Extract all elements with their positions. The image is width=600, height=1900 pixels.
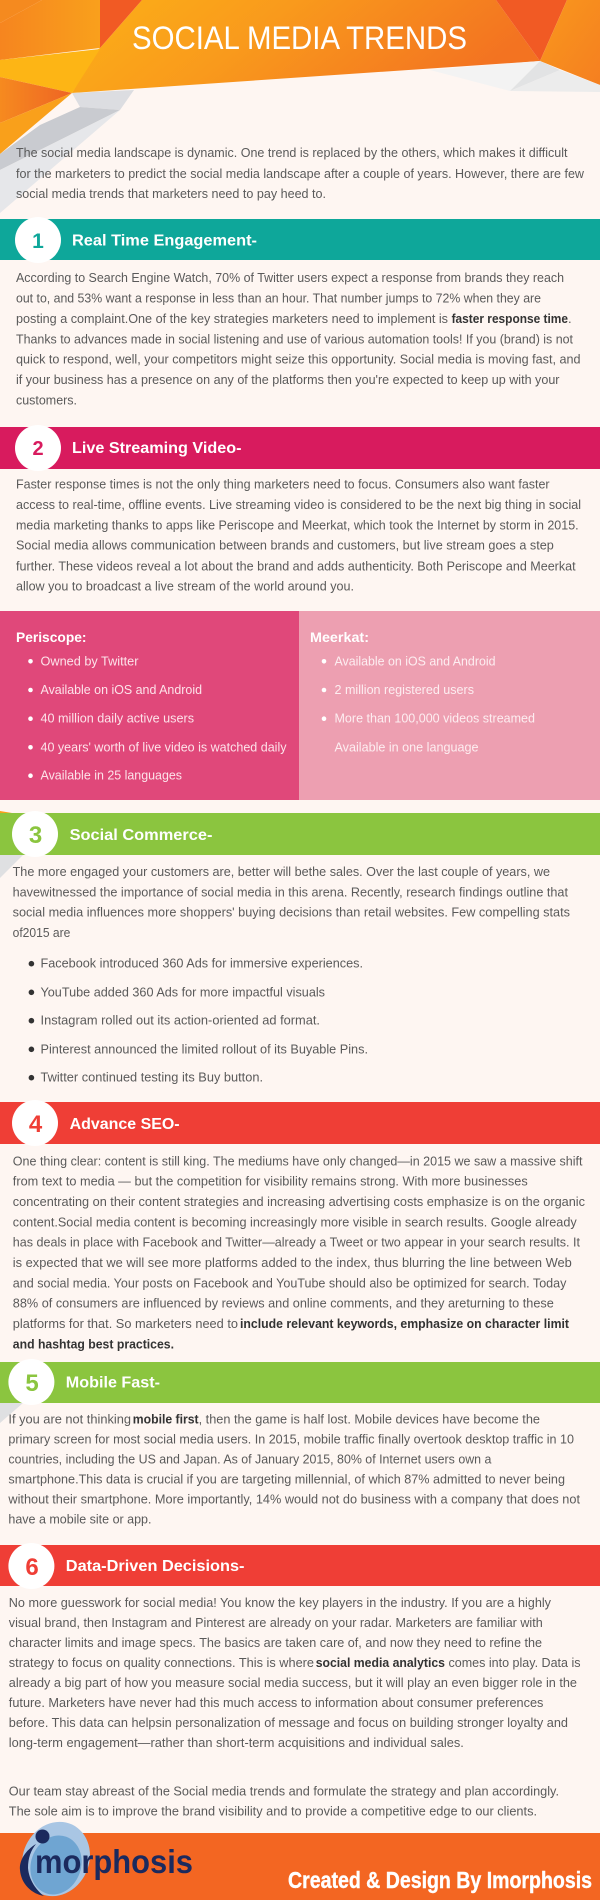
icon: number 3 badge [12,811,58,857]
panel: Periscope [0,611,299,800]
icon: number 2 badge: 2 [32,438,44,460]
section 2 body text [16,476,581,594]
section 1 body text [16,270,580,408]
intro paragraph: social media trends that marketers need to pay heed to. [16,186,326,201]
section 3 body text: of2015 are [13,925,70,940]
Periscope bullet list: Available in 25 languages [40,768,182,783]
panel: Meerkat [299,611,600,800]
section 4 body text: 88% of consumers are influenced by reviews and online comments, and they areturning to these [13,1296,554,1311]
section 6 body text: visual brand, then Instagram and Pinterest are already on your radar. Marketers are familiar with [9,1615,543,1630]
icon: number 3 badge: 3 [29,822,42,849]
Periscope bullet list: Owned by Twitter [40,653,139,668]
section 5 body text: primary screen for most social media users. In 2015, mobile traffic finally overtook desktop traffic in 10 [8,1432,574,1447]
section 4 body text: One thing clear: content is still king. The mediums have only changed—in 2015 we saw a massive shift [13,1153,583,1168]
footer bar [0,1833,600,1900]
section 5 body text: smartphone.This data is crucial if you are targeting millennial, of which 87% admitted to never being [8,1472,565,1487]
section 5 heading band [0,1359,600,1423]
section 6 body text: strategy to focus on quality connections. This is where [9,1655,314,1670]
section 4 body text: and hashtag best practices. [13,1336,174,1351]
section 3 body text: The more engaged your customers are, better will bethe sales. Over the last couple of years, we [13,864,550,879]
intro paragraph: for the marketers to predict the social media landscape after a couple of years. However, there are few [16,166,585,181]
Periscope bullet list: 40 years' worth of live video is watched daily [40,739,287,754]
Meerkat bullet list [322,653,535,754]
Meerkat heading: Meerkat: [310,629,369,645]
icon: number 2 badge [15,425,61,471]
section 6 heading band [0,1543,600,1589]
section 6 body text: long-term engagement—rather than short-term acquisitions and individual sales. [9,1735,464,1750]
section 1 body text: posting a complaint.One of the key strategies marketers need to implement is [16,311,448,326]
closing paragraph: Our team stay abreast of the Social media trends and formulate the strategy and plan accordingly. [9,1784,559,1799]
section 1 heading band [0,217,600,263]
Periscope bullet list: 40 million daily active users [40,711,194,726]
section 5 body text: , then the game is half lost. Mobile devices have become the [199,1412,540,1427]
section 4 body text: content.Social media content is becoming increasingly more visible in search results. Google already [13,1214,577,1229]
heading: Mobile Fast: Mobile Fast- [66,1374,160,1392]
section 1 body text: out to, and 53% want a response in less than an hour. That number jumps to 72% when they are [16,290,541,306]
section 3 bullet list: Facebook introduced 360 Ads for immersive experiences. [40,956,363,971]
heading: Social Commerce: Social Commerce- [70,827,212,844]
section 3 bullet list [29,956,368,1085]
section 4 body text: from text to media — but the competition for visibility remains strong. With more businesses [13,1174,528,1189]
section 1 body text: According to Search Engine Watch, 70% of Twitter users expect a response from brands they reach [16,270,564,285]
section 3 body text: havewitnessed the importance of social media in this arena. Recently, research findings outline that [13,884,568,899]
section 6 body text: before. This data can helpsin personalization of message and focus on building stronger loyalty and [9,1715,568,1730]
logo: Imorphosis [10,1811,193,1900]
Periscope bullet list [28,653,287,783]
heading: Advance SEO: Advance SEO- [70,1116,180,1133]
section 6 body text: social media analytics [316,1655,445,1670]
section 2 heading band [0,425,600,471]
icon: number 4 badge: 4 [29,1111,43,1138]
section 4 body text: concentrating on their content strategies and increasing advertising costs emphasize is on the organic [13,1194,585,1209]
heading: Data-Driven Decisions: Data-Driven Decisions- [66,1558,244,1575]
section 4 body text: has deals in place with Facebook and Twitter—already a Tweet or two appear in your search results. It [13,1235,580,1250]
section 2 body text: media marketing thanks to apps like Periscope and Meerkat, which took the Internet by storm in 2015. [16,517,579,532]
closing paragraph: The sole aim is to improve the brand visibility and to provide a competitive edge to our clients. [9,1804,537,1819]
section 6 body text: already a big part of how you measure social media success, but it will play an even bigger role in the [9,1675,577,1690]
section 1 body text: faster response time [452,311,568,326]
section 3 bullet list: Pinterest announced the limited rollout of its Buyable Pins. [40,1041,368,1056]
Meerkat bullet list: 2 million registered users [334,682,474,697]
Meerkat bullet list: Available in one language [334,739,478,754]
section 3 bullet list: YouTube added 360 Ads for more impactful visuals [40,984,325,999]
section 5 body text: have a mobile site or app. [8,1512,152,1527]
icon: number 6 badge [8,1543,54,1589]
heading: Live Streaming Video: Live Streaming Video- [72,440,242,457]
Meerkat bullet list: Available on iOS and Android [334,653,496,668]
icon: number 4 badge [12,1100,58,1146]
section 3 bullet list: Instagram rolled out its action-oriented ad format. [40,1013,320,1028]
section 3 body text [13,864,570,940]
section 2 body text: allow you to broadcast a live stream of the world around you. [16,579,354,594]
heading: Real Time Engagement: Real Time Engagement- [72,232,257,250]
icon: number 1 badge: 1 [32,230,44,253]
section 3 body text: social media influences more shoppers' buying decisions than retail websites. Few compelling stats [13,905,570,920]
section 2 body text: access to real-time, offline events. Live streaming video is considered to be the next big thing in social [16,497,581,512]
section 5 body text: without their smartphone. More importantly, 14% would not do business with a company that does not [7,1492,580,1507]
section 1 body text: . [568,311,572,326]
section 5 body text: countries, including the US and Japan. As of January 2015, 80% of Internet users own a [8,1452,492,1467]
title: SOCIAL MEDIA TRENDS [132,20,467,56]
closing paragraph [9,1784,559,1819]
header banner: geometric polygons [0,0,600,213]
section 4 body text: is expected that we will see more platforms added to the index, thus blurring the line between Web [13,1255,572,1270]
section 6 body text: character limits and image specs. The basics are taken care of, and now they need to refine the [9,1635,542,1650]
icon: number 5 badge [8,1359,54,1405]
logo: Imorphosis: morphosis [35,1843,193,1880]
section 4 body text: and social media. Your posts on Facebook and YouTube should also be optimized for search. Today [13,1275,567,1290]
section 4 body text [13,1153,585,1351]
section 3 heading band [0,811,600,878]
intro paragraph: The social media landscape is dynamic. One trend is replaced by the others, which makes it difficult [16,145,568,160]
section 4 body text: platforms for that. So marketers need to [13,1316,238,1331]
Meerkat bullet list: More than 100,000 videos streamed [334,711,535,726]
section 4 body text: include relevant keywords, emphasize on character limit [240,1316,570,1331]
section 1 body text: Thanks to advances made in social listening and use of various automation tools! If you (brand) is not [16,331,573,346]
section 2 body text: further. These videos reveal a lot about the brand and adds authenticity. Both Periscope and Meerkat [16,558,576,573]
section 1 body text: customers. [16,393,77,408]
Periscope heading: Periscope: [16,629,86,645]
section 2 body text: Social media allows communication between brands and customers, but live stream goes a step [16,538,554,553]
section 5 body text: mobile first [133,1412,199,1427]
section 3 bullet list: Twitter continued testing its Buy button. [40,1070,263,1085]
section 4 heading band [0,1100,600,1146]
section 1 body text: quick to respond, well, your competitors might seize this opportunity. Social media is moving fast, and [16,352,580,367]
icon: number 1 badge [15,217,61,263]
icon: number 5 badge: 5 [25,1370,39,1397]
section 6 body text [9,1595,581,1750]
section 6 body text: No more guesswork for social media! You know the key players in the industry. If you are a highly [9,1595,551,1610]
icon: number 6 badge: 6 [25,1554,39,1581]
section 6 body text: comes into play. Data is [448,1655,581,1670]
section 6 body text: future. Marketers have never had this much access to information about consumer preferences [9,1695,544,1710]
section 1 body text: if your business has a presence on any of the platforms then you're expected to keep up with your [16,372,560,387]
section 5 body text [7,1412,580,1527]
section 2 body text: Faster response times is not the only thing marketers need to focus. Consumers also want faster [16,476,550,491]
intro paragraph [16,145,585,201]
section 5 body text: If you are not thinking [8,1412,131,1427]
Periscope bullet list: Available on iOS and Android [40,682,202,697]
